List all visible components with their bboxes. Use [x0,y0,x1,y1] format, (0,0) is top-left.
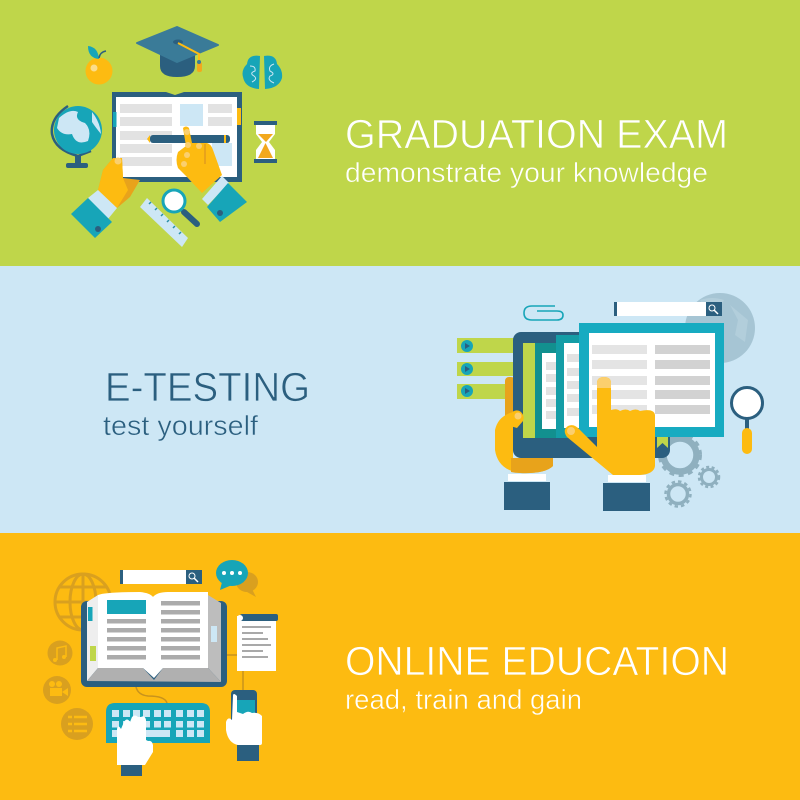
icon: paperclip [524,306,563,320]
connector lines [136,655,243,703]
icon: brain [242,56,282,89]
icon: list [61,708,93,740]
panel: e-testing [0,266,800,533]
icon: desk globe [52,106,102,168]
icon: hand typing [117,716,153,776]
monitor with open book [81,592,227,687]
icon: apple [86,46,112,84]
icon: chat bubbles [216,560,258,597]
search bar [120,570,202,584]
heading: online education: ONLINE EDUCATION [345,638,729,684]
icon: gears [660,434,719,506]
icon: magnifier [163,190,197,224]
icon: grey globe [685,293,755,363]
subheading: demonstrate your knowledge: demonstrate your knowledge [345,157,708,188]
icon: left hand holding sheet [71,158,140,238]
icon: hourglass [254,121,277,163]
icon: magnifier yellow handle [732,388,762,454]
heading: e-testing: E-TESTING [105,364,310,410]
tablet with book [513,323,724,458]
icon: pen [147,135,230,143]
search bar [614,302,722,316]
icon: wireframe globe [55,574,111,630]
video list tabs [457,338,517,399]
icon: smartphone with hand [226,690,262,761]
heading: graduation exam: GRADUATION EXAM [345,111,728,157]
subheading: read, train and gain: read, train and gain [345,684,582,715]
panel: online education [0,533,800,800]
icon: ruler [140,198,188,247]
subheading: test yourself: test yourself [103,410,258,441]
icon: music note [48,640,72,666]
icon: pointing hand [565,377,655,511]
icon: hand behind tablet [495,377,553,510]
icon: film camera [43,676,71,704]
keyboard [106,703,210,743]
icon: document [237,614,278,671]
icon: right hand writing [176,126,247,222]
icon: thumb over tablet [510,410,524,428]
open book exam sheet [112,92,242,182]
icon: graduation cap [137,27,218,77]
panel: graduation exam [0,0,800,266]
